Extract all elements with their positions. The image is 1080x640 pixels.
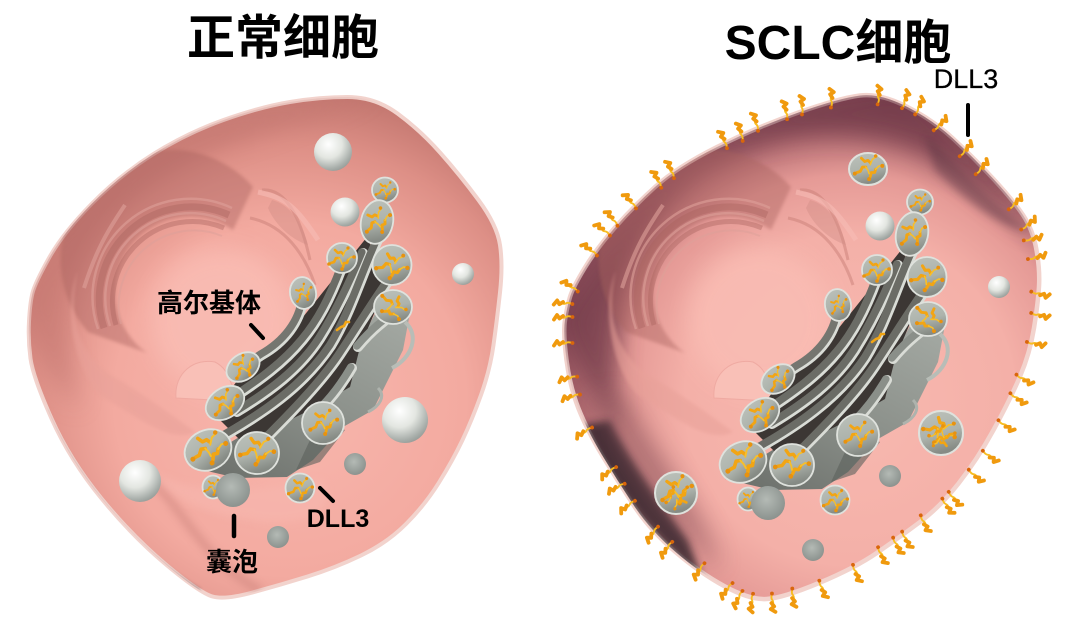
vesicles xyxy=(119,133,474,548)
label: vesicle: 囊泡 xyxy=(206,547,258,577)
golgi apparatus xyxy=(178,178,413,502)
pointer: DLL3 normal xyxy=(320,488,333,501)
title: normal cell: 正常细胞 xyxy=(187,12,379,65)
title: SCLC cell: SCLC细胞 xyxy=(725,17,951,70)
pointer: vesicle xyxy=(232,516,236,536)
cut vesicles with cargo xyxy=(655,153,963,514)
cell interior shading xyxy=(556,85,1040,578)
cell body xyxy=(29,97,501,598)
pointer: Golgi xyxy=(251,325,263,338)
vesicles xyxy=(751,212,1010,561)
cell interior shading xyxy=(20,90,376,590)
panel: normal cell xyxy=(20,90,502,598)
golgi apparatus xyxy=(713,190,948,514)
panel: SCLC cell xyxy=(554,85,1050,612)
label: DLL3 SCLC: DLL3 xyxy=(934,64,998,94)
label: DLL3 normal: DLL3 xyxy=(307,505,369,533)
label: Golgi: 高尔基体 xyxy=(157,288,261,318)
pointer: DLL3 SCLC xyxy=(966,105,970,135)
DLL3 receptors on membrane xyxy=(554,86,1050,612)
cell body xyxy=(564,95,1039,599)
